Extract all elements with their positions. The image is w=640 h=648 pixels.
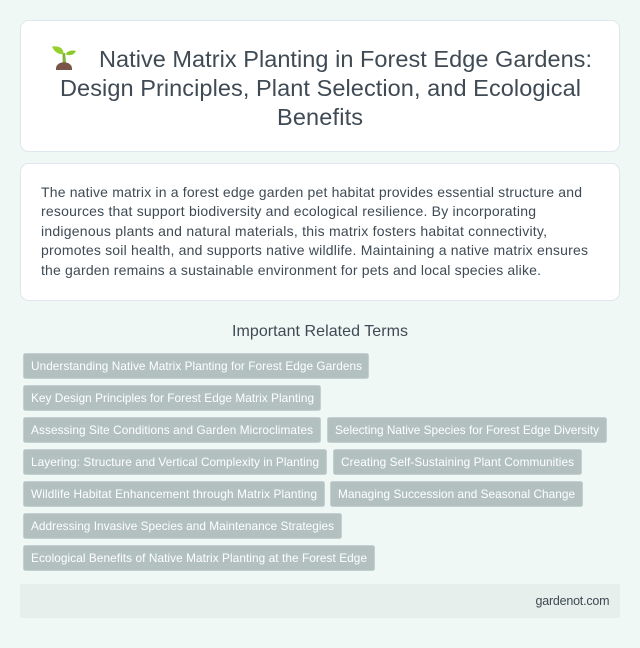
footer: gardenot.com — [536, 594, 610, 608]
description text: indigenous plants and natural materials, this matrix fosters habitat connectivity, — [41, 223, 547, 239]
tag: Wildlife Habitat Enhancement through Matrix Planting — [31, 487, 317, 501]
description text: promotes soil health, and supports native wildlife. Maintaining a native matrix ensures — [41, 242, 588, 258]
tag — [24, 386, 320, 410]
tag — [24, 482, 324, 506]
panel: related term tags — [24, 354, 606, 570]
title text: Native Matrix Planting in Forest Edge Gardens: — [99, 46, 592, 72]
heading: important related terms: Important Related Terms — [232, 323, 408, 340]
title text: Benefits — [277, 104, 363, 130]
tag — [24, 418, 320, 442]
description text: The native matrix in a forest edge garden pet habitat provides essential structure and — [41, 184, 582, 200]
panel: description card — [20, 164, 620, 300]
tag — [330, 482, 582, 506]
title text — [60, 46, 592, 130]
tag: Layering: Structure and Vertical Complexity in Planting — [31, 455, 319, 469]
description text — [41, 184, 588, 278]
description text: the garden remains a sustainable environment for pets and local species alike. — [41, 262, 541, 278]
tag: Key Design Principles for Forest Edge Matrix Planting — [31, 391, 314, 405]
footer — [20, 584, 620, 618]
description text: resources that support biodiversity and ecological resilience. By incorporating — [41, 203, 536, 219]
tag — [24, 546, 374, 570]
panel: title card — [20, 20, 620, 152]
tag: Understanding Native Matrix Planting for Forest Edge Gardens — [31, 359, 362, 373]
tag: Managing Succession and Seasonal Change — [338, 487, 575, 501]
tag: Creating Self-Sustaining Plant Communities — [341, 455, 574, 469]
tag — [328, 418, 606, 442]
tag: Assessing Site Conditions and Garden Microclimates — [31, 423, 313, 437]
tag — [24, 354, 368, 378]
tag: Addressing Invasive Species and Maintenance Strategies — [31, 519, 334, 533]
icon: seedling — [52, 46, 76, 70]
tag: Selecting Native Species for Forest Edge Diversity — [335, 423, 599, 437]
tag: Ecological Benefits of Native Matrix Planting at the Forest Edge — [31, 551, 367, 565]
tag — [24, 450, 326, 474]
tag — [334, 450, 582, 474]
tag — [24, 514, 342, 538]
title text: Design Principles, Plant Selection, and Ecological — [60, 75, 581, 101]
